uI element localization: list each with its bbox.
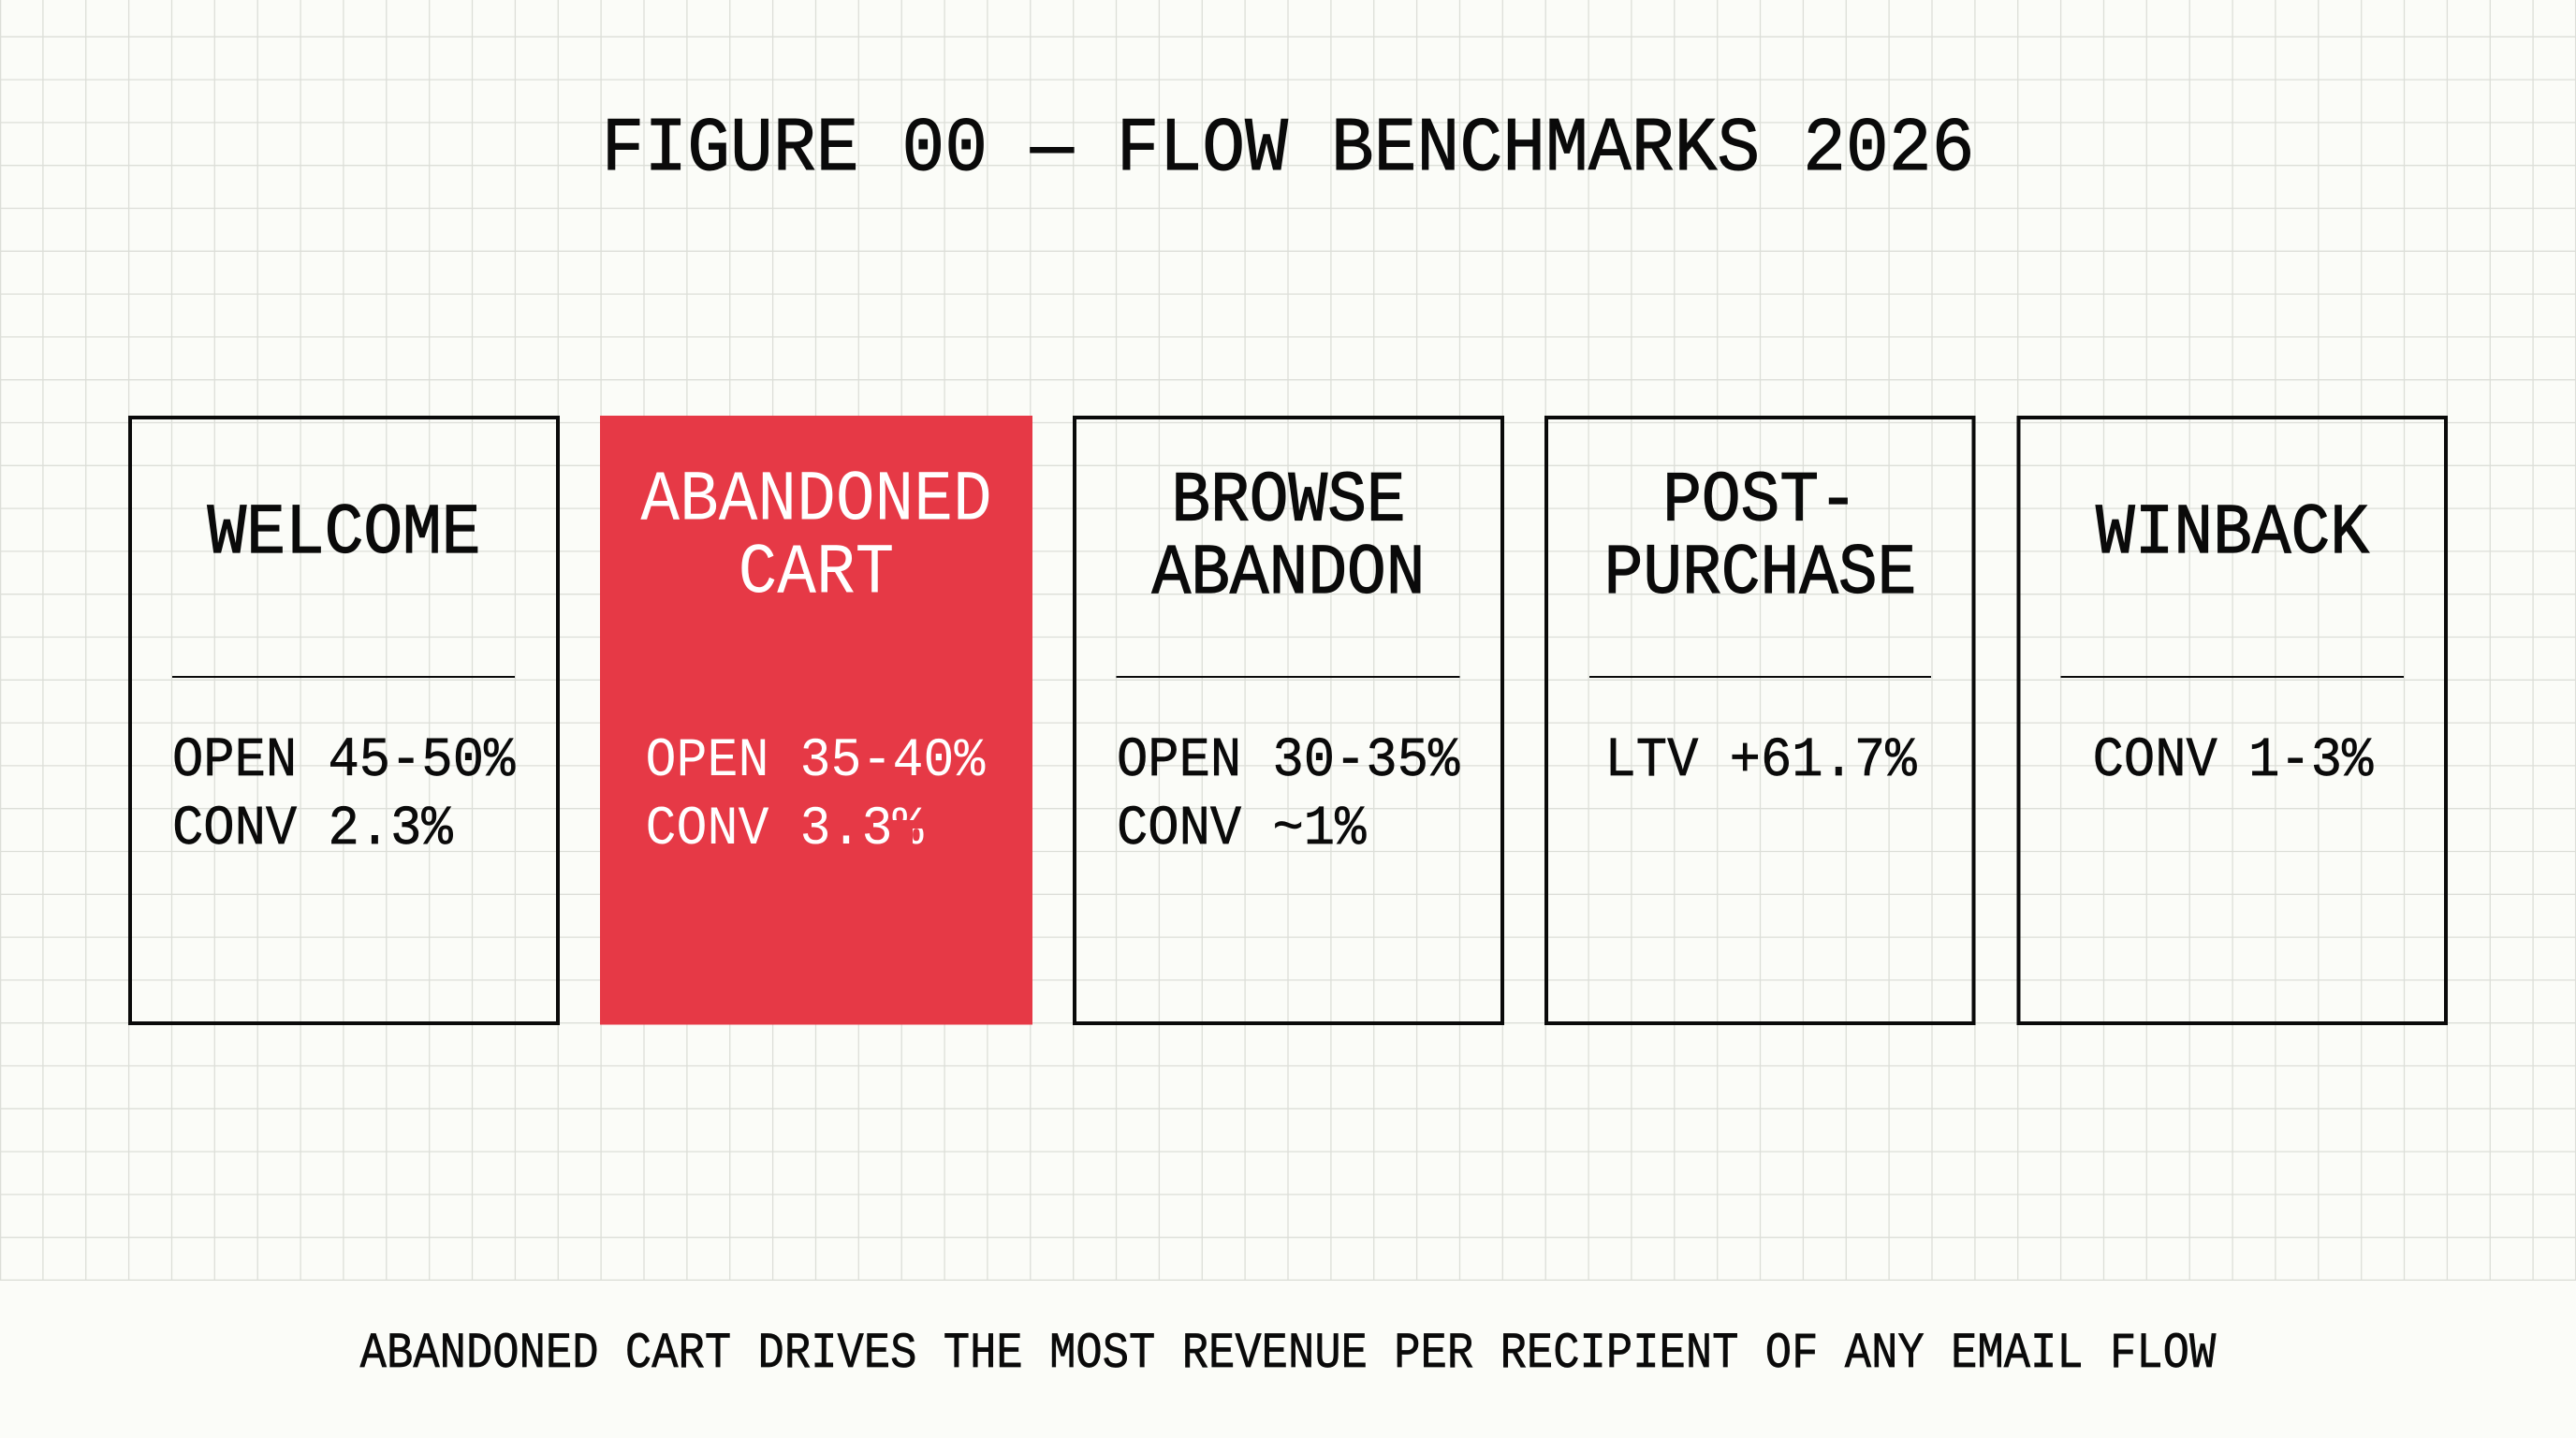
metrics: welcome bbox=[172, 729, 516, 861]
heading: post-purchase bbox=[1604, 461, 1916, 614]
heading: browse abandon: ABANDON bbox=[1152, 533, 1425, 614]
heading: abandoned cart bbox=[640, 460, 992, 613]
panel: winback bbox=[2018, 418, 2446, 1023]
panel: abandoned cart bbox=[600, 416, 1032, 1024]
heading: browse abandon: BROWSE bbox=[1171, 461, 1406, 541]
metrics: abandoned cart: CONV 3.3% bbox=[646, 799, 924, 861]
metrics: browse abandon: CONV ~1% bbox=[1117, 798, 1367, 861]
heading: abandoned cart: ABANDONED bbox=[640, 460, 992, 540]
heading: post-purchase: POST- bbox=[1662, 461, 1858, 541]
panel: welcome bbox=[130, 418, 558, 1023]
heading: winback: WINBACK bbox=[2096, 492, 2369, 574]
metrics: browse abandon bbox=[1117, 729, 1460, 861]
metrics: browse abandon: OPEN 30-35% bbox=[1117, 729, 1460, 793]
panel: post-purchase bbox=[1546, 418, 1973, 1023]
title: FIGURE 00 — FLOW BENCHMARKS 2026 bbox=[602, 106, 1974, 193]
footer caption: ABANDONED CART DRIVES THE MOST REVENUE PER RECIPIENT OF ANY EMAIL FLOW bbox=[360, 1327, 2217, 1383]
metric: winback: CONV 1-3% bbox=[2093, 729, 2374, 793]
heading: welcome: WELCOME bbox=[208, 492, 480, 574]
heading: browse abandon bbox=[1152, 461, 1425, 614]
metric: post-purchase: LTV +61.7% bbox=[1604, 729, 1917, 793]
metrics: abandoned cart: OPEN 35-40% bbox=[646, 730, 986, 793]
metrics: abandoned cart bbox=[646, 730, 986, 861]
metrics: welcome: OPEN 45-50% bbox=[172, 729, 516, 793]
panel: browse abandon bbox=[1075, 418, 1502, 1023]
mask: glitched percent sign bbox=[891, 820, 927, 845]
heading: abandoned cart: CART bbox=[739, 533, 894, 613]
metrics: welcome: CONV 2.3% bbox=[172, 798, 453, 861]
heading: post-purchase: PURCHASE bbox=[1604, 533, 1916, 614]
